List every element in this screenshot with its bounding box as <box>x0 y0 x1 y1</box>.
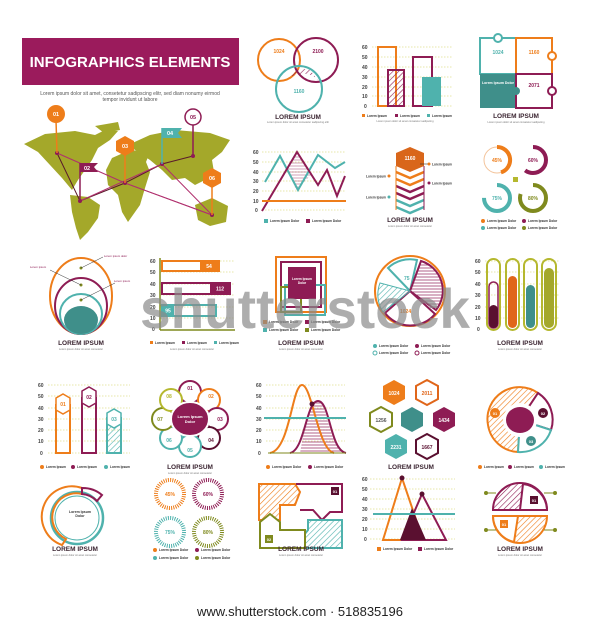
panel: bar chart: Lorem ipsum dolor sit amet consetetur sadipscing <box>376 119 434 123</box>
panel: line chart: 50 <box>253 160 259 166</box>
panel: bell curves: Lorem Ipsum Dolor <box>272 465 302 469</box>
panel: nested circles: Lorem ipsum dolor <box>104 254 127 258</box>
panel: pie chart: Lorem Ipsum Dolor <box>421 344 451 348</box>
panel: flower: 08 <box>166 394 172 400</box>
panel: bell curves: 0 <box>258 451 261 457</box>
panel: tubes: 10 <box>475 316 481 322</box>
panel: flower: 02 <box>208 394 214 400</box>
panel: arc circle: LOREM IPSUM <box>52 546 98 553</box>
panel: hexagons: 2011 <box>422 391 433 397</box>
panel: venn: 1024 <box>273 49 285 55</box>
panel: venn: Lorem ipsum dolor sit amet consetetur sadipscing elitr <box>267 120 329 124</box>
panel: bar chart: Lorem Ipsum <box>432 114 452 118</box>
panel: puzzle: LOREM IPSUM <box>493 113 539 120</box>
panel: square maze: Lorem ipsum dolor sit amet consetetur <box>279 347 323 351</box>
panel: triangles: 50 <box>362 487 368 493</box>
panel: puzzle: Lorem Ipsum Dolor <box>482 81 515 85</box>
panel: dotted donuts: Lorem Ipsum Dolor <box>201 548 231 552</box>
panel: horizontal bars: 50 <box>150 270 156 276</box>
panel: triangles: 20 <box>362 517 368 523</box>
panel: pie chart: 1024 <box>400 309 411 315</box>
panel: dotted donuts: Lorem Ipsum Dolor <box>201 556 231 560</box>
panel: split semicircles: 01 <box>532 498 537 503</box>
panel: chevron stack: Lorem Ipsum <box>432 182 452 186</box>
panel: donuts: Lorem Ipsum Dolor <box>487 219 517 223</box>
panel: split semicircles <box>484 483 557 557</box>
panel: bar chart: 60 <box>362 45 368 51</box>
panel: arc circle: Lorem ipsum dolor sit amet consetetur <box>53 553 97 557</box>
panel: square maze: LOREM IPSUM <box>278 340 324 347</box>
map pins: 05 <box>190 115 196 121</box>
panel: bell curves: 60 <box>256 383 262 389</box>
panel: horizontal bars: Lorem Ipsum <box>187 341 207 345</box>
panel: split semicircles: 01 <box>502 522 507 527</box>
panel: line chart: 40 <box>253 170 259 176</box>
panel: tubes: 0 <box>477 327 480 333</box>
panel: puzzle: 1160 <box>529 50 540 56</box>
map pins: 04 <box>167 131 174 137</box>
panel: arrow bars: 02 <box>86 395 92 401</box>
panel: arrow bars: 40 <box>38 406 44 412</box>
panel: arrows: 02 <box>267 537 272 542</box>
panel: arrow bars: Lorem Ipsum <box>46 465 66 469</box>
panel: hexagons: LOREM IPSUM <box>388 464 434 471</box>
panel: puzzle: 2071 <box>528 83 540 89</box>
subtitle: Lorem ipsum dolor sit amet, consetetur sadipscing elitr, sed diam nonumy eirmod <box>40 91 220 97</box>
panel: horizontal bars: 30 <box>150 293 156 299</box>
panel: flower: LOREM IPSUM <box>167 464 213 471</box>
panel: puzzle <box>480 34 556 124</box>
panel: triangles: 60 <box>362 477 368 483</box>
panel: tubes <box>475 259 560 351</box>
panel: line chart: Lorem Ipsum Dolor <box>270 219 300 223</box>
panel: nested circles: Lorem ipsum <box>114 279 131 283</box>
panel: pie chart: Lorem Ipsum Dolor <box>421 351 451 355</box>
panel: arrow bars: Lorem Ipsum <box>110 465 130 469</box>
map pins <box>47 105 221 215</box>
map pins: 01 <box>53 112 59 118</box>
panel: triangles: 40 <box>362 497 368 503</box>
panel: bell curves: Lorem Ipsum Dolor <box>314 465 344 469</box>
panel: dotted donuts: 75% <box>165 530 176 536</box>
panel: dotted donuts: 80% <box>203 530 214 536</box>
footer: www.shutterstock.com · 518835196 <box>196 604 403 619</box>
panel: arrow bars: 10 <box>38 439 44 445</box>
panel: bar chart: 30 <box>362 75 368 81</box>
panel: horizontal bars: Lorem Ipsum <box>219 341 239 345</box>
panel: line chart: 60 <box>253 150 259 156</box>
panel: flower <box>152 381 228 475</box>
panel: hexagons: 1667 <box>421 445 433 451</box>
panel: bar chart: Lorem Ipsum <box>367 114 387 118</box>
panel: bar chart <box>362 45 452 123</box>
panel: square maze <box>263 257 341 351</box>
panel: tubes: 60 <box>475 259 481 265</box>
panel: line chart: Lorem Ipsum Dolor <box>312 219 342 223</box>
panel: flower: Lorem Ipsum <box>177 414 203 419</box>
panel: segmented circle: Lorem Ipsum <box>545 465 565 469</box>
panel: flower: 07 <box>157 417 163 423</box>
panel: flower: 05 <box>187 448 193 454</box>
panel: dotted donuts: Lorem Ipsum Dolor <box>159 548 189 552</box>
panel: horizontal bars: Lorem ipsum dolor sit amet consetetur <box>170 347 214 351</box>
panel: horizontal bars: 40 <box>150 282 156 288</box>
panel: puzzle: Lorem ipsum dolor sit amet consetetur sadipscing <box>487 120 545 124</box>
panel: horizontal bars: 60 <box>150 259 156 265</box>
panel: donuts: 80% <box>528 196 539 202</box>
panel: arrows: 01 <box>333 489 338 494</box>
panel: bell curves: 20 <box>256 428 262 434</box>
world map <box>24 122 230 240</box>
panel: flower: 04 <box>208 438 214 444</box>
panel: bell curves: 10 <box>256 439 262 445</box>
panel: square maze: Lorem Ipsum <box>292 277 312 281</box>
panel: segmented circle: 03 <box>529 439 534 444</box>
panel: triangles: 10 <box>362 527 368 533</box>
panel: split semicircles: Lorem ipsum dolor sit amet consetetur <box>498 553 542 557</box>
panel: chevron stack: LOREM IPSUM <box>387 217 433 224</box>
panel: square maze: Lorem Ipsum Dolor <box>269 328 299 332</box>
panel: dotted donuts: 60% <box>203 492 214 498</box>
watermark: shutterstock <box>140 277 471 340</box>
panel: pie chart: Lorem Ipsum Dolor <box>379 344 409 348</box>
map pins: 03 <box>122 144 128 150</box>
panel: segmented circle: Lorem Ipsum <box>484 465 504 469</box>
panel: nested circles <box>30 254 131 351</box>
title banner: INFOGRAPHICS ELEMENTS <box>30 54 230 71</box>
panel: hexagons: 1434 <box>438 418 450 424</box>
panel: flower: Lorem ipsum dolor sit amet consetetur <box>168 471 212 475</box>
panel: donuts: Lorem Ipsum Dolor <box>487 226 517 230</box>
panel: line chart <box>253 150 346 223</box>
panel: arrow bars: 0 <box>40 451 43 457</box>
panel: bell curves: 30 <box>256 417 262 423</box>
panel: horizontal bars: 112 <box>216 286 224 292</box>
panel: chevron stack: Lorem ipsum dolor sit amet consetetur <box>388 224 432 228</box>
panel: chevron stack: Lorem Ipsum <box>432 162 452 166</box>
panel: nested circles: Lorem ipsum dolor sit amet consetetur <box>59 347 103 351</box>
panel: dotted donuts: Lorem Ipsum Dolor <box>159 556 189 560</box>
panel: donuts: Lorem Ipsum Dolor <box>528 226 558 230</box>
panel: horizontal bars: 0 <box>152 327 155 333</box>
panel: triangles: Lorem Ipsum Dolor <box>424 547 454 551</box>
panel: pie chart <box>373 256 451 355</box>
panel: bell curves <box>256 383 346 469</box>
panel: hexagons: 1256 <box>375 418 387 424</box>
panel: dotted donuts <box>153 480 231 560</box>
panel: flower: 06 <box>166 438 172 444</box>
panel: tubes: 40 <box>475 282 481 288</box>
panel: segmented circle: 02 <box>541 411 546 416</box>
map pins: 06 <box>209 176 215 182</box>
panel: flower: Dolor <box>185 419 196 424</box>
panel: segmented circle: 01 <box>493 411 498 416</box>
panel: venn: 1160 <box>294 89 305 95</box>
panel: arrow bars: 03 <box>111 417 117 423</box>
panel: line chart: 0 <box>255 208 258 214</box>
panel: nested circles: LOREM IPSUM <box>58 340 104 347</box>
panel: donuts: 45% <box>492 158 503 164</box>
panel: donuts: Lorem Ipsum Dolor <box>528 219 558 223</box>
panel: split semicircles: LOREM IPSUM <box>497 546 543 553</box>
panel: bar chart: 50 <box>362 55 368 61</box>
panel: arrow bars: 01 <box>60 402 66 408</box>
subtitle <box>40 91 220 103</box>
panel: venn <box>258 38 338 124</box>
panel: arc circle <box>42 486 103 557</box>
panel: arrow bars: 60 <box>38 383 44 389</box>
panel: arrow bars: 50 <box>38 394 44 400</box>
panel: bar chart: Lorem Ipsum <box>400 114 420 118</box>
panel: chevron stack: Lorem Ipsum <box>366 174 386 178</box>
panel: arrow bars <box>38 383 130 469</box>
panel: horizontal bars: 95 <box>165 308 171 314</box>
panel: arrow bars: 30 <box>38 417 44 423</box>
panel: bell curves: 50 <box>256 394 262 400</box>
panel: line chart: 20 <box>253 189 259 195</box>
panel: segmented circle: Lorem Ipsum <box>514 465 534 469</box>
panel: chevron stack <box>366 147 452 228</box>
subtitle: tempor invidunt ut labore <box>102 97 158 103</box>
panel: square maze: Dolor <box>298 281 307 285</box>
panel: pie chart: Lorem Ipsum Dolor <box>379 351 409 355</box>
panel: bar chart: 0 <box>364 104 367 110</box>
panel: venn: LOREM IPSUM <box>275 114 321 121</box>
panel: horizontal bars: Lorem Ipsum <box>155 341 175 345</box>
panel: tubes: Lorem ipsum dolor sit amet consetetur <box>498 347 542 351</box>
panel: pie chart: 75 <box>404 276 410 282</box>
panel: puzzle: 1024 <box>492 50 504 56</box>
panel: arc circle: Lorem Ipsum <box>69 510 91 514</box>
panel: arrow bars: Lorem Ipsum <box>77 465 97 469</box>
panel: donuts: 60% <box>528 158 539 164</box>
title banner <box>22 38 239 85</box>
panel: bell curves: 40 <box>256 406 262 412</box>
panel: arrows: LOREM IPSUM <box>278 546 324 553</box>
panel: bar chart: 20 <box>362 85 368 91</box>
panel: venn: 2100 <box>312 49 324 55</box>
panel: triangles <box>362 476 455 551</box>
panel: arrow bars: 20 <box>38 428 44 434</box>
panel: segmented circle <box>478 387 565 469</box>
panel: horizontal bars: 54 <box>206 264 212 270</box>
panel: chevron stack: 1160 <box>405 156 416 162</box>
panel: hexagons <box>370 380 455 471</box>
panel: arrows <box>259 484 342 557</box>
panel: line chart: 10 <box>253 199 259 205</box>
panel: bar chart: 10 <box>362 94 368 100</box>
panel: flower: 03 <box>217 417 223 423</box>
panel: line chart: 30 <box>253 179 259 185</box>
map pins: 02 <box>84 166 90 172</box>
panel: flower: 01 <box>187 386 193 392</box>
panel: triangles: 30 <box>362 507 368 513</box>
panel: nested circles: Lorem ipsum <box>30 265 47 269</box>
panel: triangles: 0 <box>364 537 367 543</box>
panel: bar chart: 40 <box>362 65 368 71</box>
panel: arc circle: Dolor <box>75 514 85 518</box>
panel: chevron stack: Lorem Ipsum <box>366 196 386 200</box>
panel: horizontal bars <box>150 258 239 351</box>
panel: triangles: Lorem Ipsum Dolor <box>383 547 413 551</box>
panel: tubes: LOREM IPSUM <box>497 340 543 347</box>
panel: square maze: Lorem Ipsum Dolor <box>269 320 299 324</box>
panel: arrows: Lorem ipsum dolor sit amet consetetur <box>279 553 323 557</box>
panel: dotted donuts: 45% <box>165 492 176 498</box>
panel: hexagons: 1024 <box>388 391 400 397</box>
panel: donuts: 75% <box>492 196 503 202</box>
panel: square maze: Lorem Ipsum Dolor <box>311 320 341 324</box>
panel: tubes: 30 <box>475 293 481 299</box>
panel: donuts <box>481 147 558 230</box>
panel: horizontal bars: 10 <box>150 316 156 322</box>
panel: tubes: 20 <box>475 305 481 311</box>
panel: tubes: 50 <box>475 270 481 276</box>
panel: square maze: Lorem Ipsum Dolor <box>311 328 341 332</box>
panel: horizontal bars: 20 <box>150 305 156 311</box>
panel: hexagons: 2231 <box>390 445 402 451</box>
